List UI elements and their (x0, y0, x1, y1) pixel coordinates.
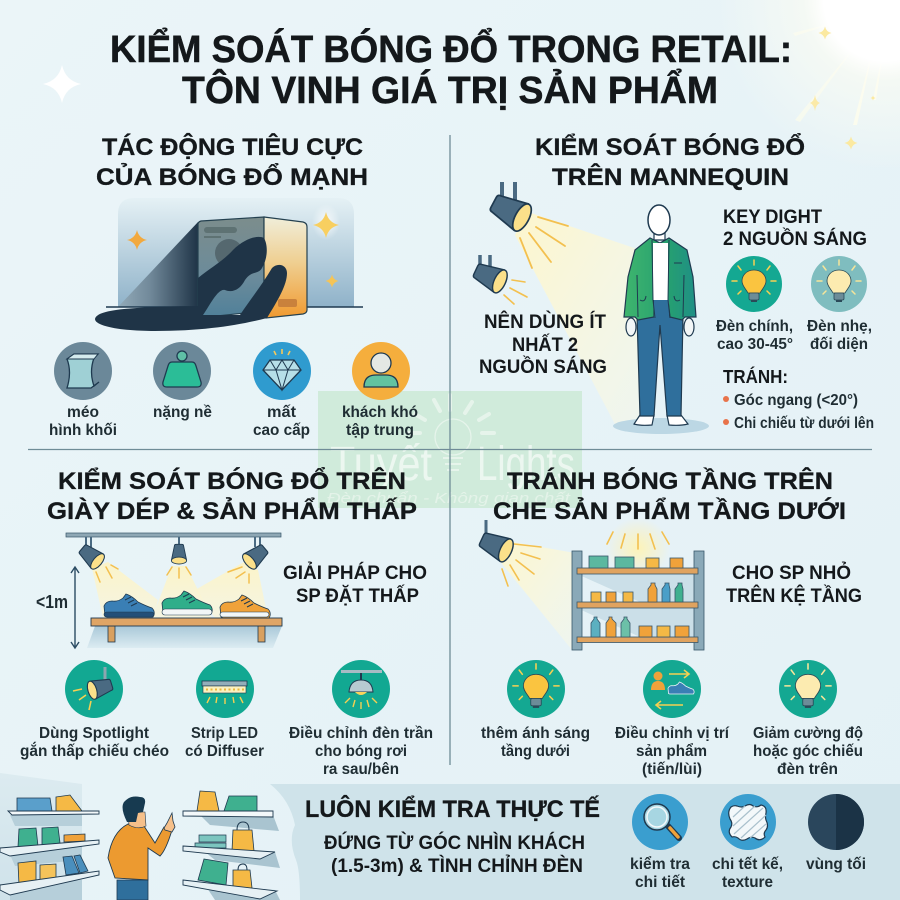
illustration: track lights and shoes (66, 533, 282, 648)
text: nên dùng ít nhất 2 nguồn sáng: NHẤT 2 (512, 334, 578, 356)
icon: texture (720, 794, 776, 850)
label: đèn chính (716, 318, 793, 353)
label: điều chỉnh vị trí: Điều chỉnh vị trí (615, 725, 730, 742)
panel: luôn kiểm tra thực tế (0, 773, 900, 900)
label: mất cao cấp (253, 404, 310, 439)
label: ceiling lamp (289, 725, 433, 778)
label: strip LED: có Diffuser (185, 743, 264, 760)
heading: mannequin: KIỂM SOÁT BÓNG ĐỔ (535, 133, 805, 161)
panel: giày dép (20, 467, 433, 778)
label: méo hình khối: méo (67, 404, 99, 421)
heading: mannequin: TRÊN MANNEQUIN (552, 163, 789, 191)
text: key light: 2 NGUỒN SÁNG (723, 228, 867, 250)
text: tránh: Chi chiếu từ dưới lên (734, 415, 874, 432)
text: tránh (723, 366, 874, 432)
title: TÔN VINH GIÁ TRỊ SẢN PHẨM (182, 67, 718, 112)
text: tránh: TRÁNH: (723, 366, 788, 387)
illustration: person checking shelves (108, 797, 175, 900)
icon: giảm cường độ (779, 660, 837, 718)
text: nên dùng ít nhất 2 nguồn sáng: NGUỒN SÁNG (479, 356, 607, 378)
heading: tác động tiêu cực: CỦA BÓNG ĐỔ MẠNH (96, 162, 368, 191)
label: giảm cường độ (753, 725, 863, 778)
label: kiểm tra chi tiết: kiểm tra (630, 855, 690, 873)
label: méo hình khối (49, 404, 117, 439)
label: mất cao cấp: cao cấp (253, 422, 310, 439)
icon: small spotlight (471, 255, 527, 304)
bottom band (270, 784, 900, 900)
icon: ceiling lamp (332, 660, 390, 718)
text: luôn kiểm tra thực tế: (1.5-3m) & TÌNH CHỈNH ĐÈN (331, 855, 583, 877)
label: strip LED (185, 725, 264, 760)
icon: thêm ánh sáng (507, 660, 565, 718)
label: điều chỉnh vị trí (615, 725, 730, 778)
text: key light (723, 207, 867, 250)
title: KIỂM SOÁT BÓNG ĐỔ TRONG RETAIL: (110, 26, 792, 71)
icon: strip LED (196, 660, 254, 718)
label: đèn chính: cao 30-45° (717, 336, 793, 353)
panel: tác động tiêu cực (49, 133, 418, 439)
label: ceiling lamp: cho bóng rơi (315, 743, 407, 760)
label: điều chỉnh vị trí: sản phẩm (636, 742, 707, 760)
text: tránh: Góc ngang (<20°) (734, 392, 858, 409)
label: spotlight: gắn thấp chiếu chéo (20, 741, 169, 760)
watermark: Tuyết Lights: Tuyết (330, 438, 432, 491)
panel: mannequin (471, 133, 874, 434)
dividers (28, 135, 872, 765)
light beam (515, 212, 640, 428)
label: khách khó tập trung: khách khó (342, 404, 418, 421)
icon: nặng nề (153, 342, 211, 400)
panel: kệ tầng (477, 467, 863, 778)
label: vùng tối: vùng tối (806, 856, 866, 873)
label: giảm cường độ: Giảm cường độ (753, 725, 863, 742)
arrow: under one metre (36, 567, 79, 648)
heading: tác động tiêu cực: TÁC ĐỘNG TIÊU CỰC (102, 133, 363, 161)
heading: kệ tầng: CHE SẢN PHẨM TẦNG DƯỚI (493, 496, 846, 525)
watermark: Tuyết Lights: Lights (477, 438, 575, 491)
label: điều chỉnh vị trí: (tiến/lùi) (642, 761, 702, 778)
label: chi tiết kế, texture (712, 856, 783, 891)
icon: magnifier (632, 794, 688, 850)
label: đèn nhẹ: Đèn nhẹ, (807, 318, 872, 335)
illustration: spotlight and shelf (477, 518, 704, 650)
icon: soft bulb (811, 256, 867, 312)
label: ceiling lamp: ra sau/bên (323, 761, 399, 778)
heading: giày dép: KIỂM SOÁT BÓNG ĐỔ TRÊN (58, 467, 406, 495)
label: khách khó tập trung: tập trung (346, 422, 414, 439)
text: giải pháp (283, 562, 427, 607)
mannequin figure (613, 205, 709, 434)
text: luôn kiểm tra thực tế: ĐỨNG TỪ GÓC NHÌN KHÁCH (324, 832, 585, 854)
text: giải pháp: GIẢI PHÁP CHO (283, 562, 427, 584)
heading: kệ tầng: TRÁNH BÓNG TẦNG TRÊN (507, 467, 833, 495)
illustration: box with harsh shadow (95, 198, 363, 331)
icon: khách khó tập trung (352, 342, 410, 400)
label: chi tiết kế, texture: texture (722, 874, 773, 891)
text: cho sp nhỏ: TRÊN KỆ TẦNG (726, 585, 862, 607)
icon: spotlight (65, 660, 123, 718)
label: ceiling lamp: Điều chỉnh đèn trần (289, 725, 433, 742)
label: giảm cường độ: đèn trên (777, 761, 838, 778)
label: kiểm tra chi tiết: chi tiết (635, 874, 686, 891)
heading: giày dép (47, 467, 417, 525)
icon: main bulb (726, 256, 782, 312)
illustration: left wall shelves (0, 773, 99, 900)
illustration: right wall shelves (183, 791, 280, 900)
text: luôn kiểm tra thực tế (305, 795, 600, 877)
label: đèn chính: Đèn chính, (716, 318, 793, 335)
title (110, 26, 792, 112)
sun glow top right (700, 0, 900, 170)
label: đèn nhẹ (807, 318, 872, 353)
heading: mannequin (535, 133, 805, 191)
arrow: under one metre: <1m (36, 592, 68, 612)
icon: điều chỉnh vị trí (643, 660, 701, 718)
heading: tác động tiêu cực (96, 133, 368, 191)
text: luôn kiểm tra thực tế: LUÔN KIỂM TRA THỰC TẾ (305, 795, 600, 823)
label: đèn nhẹ: đối diện (810, 336, 868, 353)
label: méo hình khối: hình khối (49, 422, 117, 439)
watermark: Tuyết Lights: Đèn chuẩn - Không gian chất (327, 490, 571, 507)
label: mất cao cấp: mất (267, 404, 297, 421)
label: thêm ánh sáng: tầng dưới (501, 743, 570, 760)
heading: kệ tầng (493, 467, 846, 525)
sparkle top left (43, 65, 81, 103)
label: nặng nề: nặng nề (153, 404, 212, 421)
label: strip LED: Strip LED (191, 725, 258, 742)
label: khách khó tập trung (342, 404, 418, 439)
icon: vùng tối (808, 794, 864, 850)
text: key light: KEY DIGHT (723, 207, 822, 228)
text: cho sp nhỏ: CHO SP NHỎ (732, 562, 851, 584)
label: spotlight (20, 725, 169, 760)
heading: giày dép: GIÀY DÉP & SẢN PHẨM THẤP (47, 496, 417, 525)
label: chi tiết kế, texture: chi tết kế, (712, 856, 783, 873)
watermark: Tuyết Lights (318, 391, 582, 508)
label: giảm cường độ: hoặc góc chiếu (753, 743, 863, 760)
label: thêm ánh sáng (481, 725, 590, 760)
icon: large spotlight (487, 182, 568, 268)
text: nên dùng ít nhất 2 nguồn sáng: NÊN DÙNG ÍT (484, 311, 606, 333)
label: thêm ánh sáng: thêm ánh sáng (481, 725, 590, 742)
icon: méo hình khối (54, 342, 112, 400)
text: giải pháp: SP ĐẶT THẤP (296, 585, 419, 607)
text: nên dùng ít nhất 2 nguồn sáng (479, 311, 607, 378)
label: kiểm tra chi tiết (630, 855, 690, 891)
label: spotlight: Dùng Spotlight (39, 725, 150, 742)
icon: mất cao cấp (253, 342, 311, 400)
text: cho sp nhỏ (726, 562, 862, 607)
